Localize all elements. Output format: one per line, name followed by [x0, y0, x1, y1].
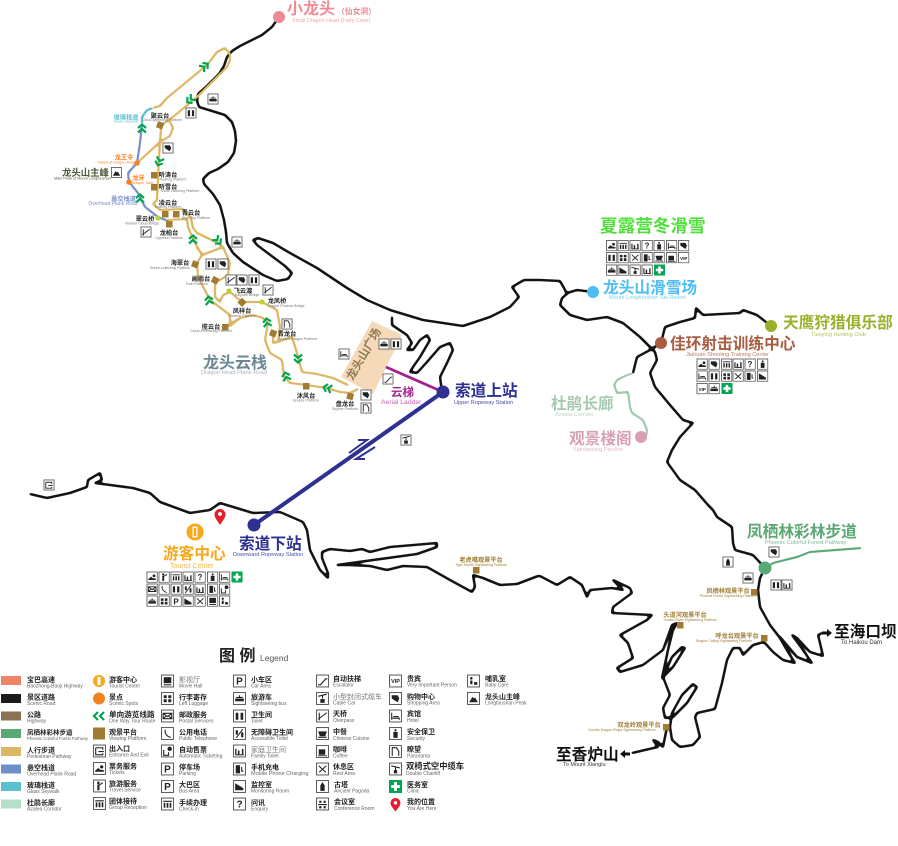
- legend column: facilities B: Car Area: [251, 684, 271, 690]
- legend column: spots and services: Tickets: [109, 770, 125, 776]
- legend column: facilities D: 双椅式空中缆车: [406, 761, 464, 771]
- legend heading: 图 例: [219, 647, 255, 665]
- label: aerial ladder: [381, 385, 422, 406]
- label: sightseeing pavilion: 观景楼阁: [569, 429, 632, 448]
- viewing platform labels: 呼龙台观景平台: [715, 632, 759, 640]
- trail point labels: Skyline Platform: [332, 407, 358, 411]
- trail point labels: 翠云桥: [136, 215, 155, 223]
- orange spot and path labels: [88, 114, 154, 207]
- legend column: spots and services: 票务服务: [109, 762, 137, 770]
- azalea corridor path: [614, 373, 647, 437]
- trail point labels: Phoenix Platform: [228, 314, 256, 318]
- legend column: road types: 公路: [27, 710, 41, 719]
- legend column: spots and services: Viewing Platform: [109, 736, 146, 742]
- legend column: facilities D: Clinic: [407, 788, 420, 794]
- legend heading: [219, 647, 289, 665]
- label: to Haikou Dam: 至海口坝: [834, 623, 897, 641]
- orange spot and path labels: 龙牙: [132, 174, 145, 182]
- legend column: facilities D: 医务室: [407, 780, 428, 789]
- label: hunting club: Tianying Hunting Club: [811, 332, 866, 338]
- label: camping and skiing: 夏露营冬滑雪: [600, 216, 706, 236]
- legend column: facilities C: Rest Area: [333, 771, 355, 777]
- trail point labels: Snow Listening Platform: [161, 189, 199, 193]
- legend column: facilities C: 小型封闭式缆车: [333, 692, 382, 701]
- orange spot and path labels: 悬空栈道: [111, 195, 137, 203]
- icon: you are here pin: [214, 509, 226, 525]
- label: upper station: 索道上站: [455, 381, 518, 400]
- trail point labels: 青龙台: [278, 330, 296, 338]
- icon grid: ski resort: [606, 240, 689, 276]
- legend column: road types: 宝巴高速: [27, 675, 55, 684]
- viewing platform labels: 老虎嘴观景平台: [459, 556, 503, 564]
- trail point labels: Hidden Dragon Platform: [279, 337, 317, 341]
- legend column: facilities B: Enquiry: [251, 806, 268, 812]
- legend column: facilities C: 天桥: [333, 709, 347, 718]
- label: to Xianglu Mountain: 至香炉山: [556, 746, 619, 764]
- tour direction chevrons: [136, 61, 332, 393]
- legend column: facilities C: Escalator: [333, 682, 354, 688]
- legend column: road types: Baozhong-Baoji Highway: [27, 684, 83, 690]
- legend column: facilities A: 手续办理: [179, 798, 207, 807]
- legend column: facilities C: Conference Room: [334, 806, 375, 812]
- legend heading: Legend: [260, 653, 289, 663]
- legend column: facilities A: Postal Services: [179, 718, 214, 724]
- legend column: facilities B: 监控室: [251, 780, 272, 789]
- legend column: spots and services: Tourist Center: [109, 684, 140, 690]
- legend column: facilities A: 影视厅: [179, 675, 200, 684]
- legend column: spots and services: One Way Tour Route: [109, 718, 156, 724]
- station and spot dots: [126, 11, 777, 574]
- legend column: facilities C: Overpass: [333, 718, 355, 724]
- legend column: facilities E: [468, 674, 527, 706]
- legend column: spots and services: Travel Service: [109, 788, 141, 794]
- legend column: facilities D: Very Important Person: [407, 682, 457, 688]
- legend column: facilities D: Shopping Area: [407, 700, 440, 706]
- legend column: facilities D: 安全保卫: [407, 727, 435, 736]
- viewing platform labels: Dragon Calling Sightseeing Platform: [696, 639, 752, 643]
- trail point labels: Cypress Platform: [155, 236, 183, 240]
- trail point labels: 盘龙台: [336, 400, 354, 408]
- legend column: road types: Scenic Road: [27, 701, 56, 707]
- legend column: facilities D: 瞭望: [407, 744, 421, 754]
- trail point labels: Verdant Cloud Bridge: [125, 222, 159, 226]
- overhead plank road: [128, 124, 168, 221]
- legend column: spots and services: [93, 675, 156, 811]
- legend column: spots and services: 观景平台: [109, 728, 137, 736]
- legend column: facilities B: 手机充电: [251, 762, 279, 772]
- label: sightseeing pavilion: Sightseeing Pavilion: [573, 447, 623, 453]
- legend column: spots and services: 游客中心: [109, 675, 137, 684]
- viewing platform labels: Phoenix Forest Sightseeing Platform: [700, 594, 756, 598]
- legend column: facilities D: Security: [407, 736, 426, 742]
- legend column: road types: Highway: [27, 718, 47, 724]
- legend column: facilities D: 宾馆: [407, 709, 421, 718]
- legend column: facilities C: 休息区: [333, 762, 354, 771]
- legend column: facilities A: Bus Area: [179, 788, 200, 794]
- legend column: facilities C: Coffee: [333, 754, 348, 760]
- trail point labels: Blue Sky Platform: [182, 216, 210, 220]
- label: tourist center: [163, 524, 226, 570]
- legend column: spots and services: Scenic Spots: [109, 701, 139, 707]
- viewing platform labels: [455, 556, 759, 732]
- aerial ladder line: [386, 367, 443, 392]
- trail point labels: Cloud-gathering Platform: [142, 118, 182, 122]
- label: aerial ladder: 云梯: [391, 385, 414, 399]
- icon grid: ski resort: VIP: [680, 256, 687, 261]
- label: upper station: Upper Ropeway Station: [454, 400, 513, 406]
- main peak label: [54, 167, 122, 180]
- trail point labels: 凤祥台: [233, 307, 251, 315]
- legend column: facilities A: 大巴区: [179, 780, 200, 789]
- legend column: facilities B: Accessible Toilet: [251, 736, 288, 742]
- legend column: facilities D: VIP: [391, 679, 400, 685]
- orange spot and path labels: 龙王令: [115, 154, 134, 162]
- legend column: spots and services: 景点: [109, 692, 123, 702]
- legend column: facilities B: 旅游车: [251, 692, 272, 702]
- legend column: facilities C: 咖啡: [333, 744, 347, 754]
- trail point labels: 聚云台: [151, 112, 169, 120]
- orange spot and path labels: Dragon Tooth: [132, 181, 154, 185]
- label: lower station: 索道下站: [239, 534, 302, 553]
- trail point labels: Kaiyuan Bridge: [235, 293, 259, 297]
- legend column: facilities B: P: [236, 676, 243, 688]
- trail point labels: Rain Platform: [186, 282, 208, 286]
- icon grid: tourist center: ?: [198, 573, 203, 582]
- legend column: facilities B: Monitoring Room: [251, 788, 289, 794]
- trail point labels: 龙凤桥: [268, 297, 287, 305]
- panel: legend: [1, 647, 527, 812]
- label: hunting club: [783, 313, 893, 338]
- label: upper station: [454, 381, 518, 406]
- legend column: spots and services: Group Reception: [109, 805, 147, 811]
- legend column: facilities A: [162, 675, 223, 812]
- orange spot and path labels: Overhead Plank Road: [88, 201, 138, 207]
- label: shooting center: 佳环射击训练中心: [670, 334, 796, 353]
- legend column: facilities B: Toilet: [251, 718, 263, 724]
- legend column: facilities B: 卫生间: [251, 710, 272, 719]
- legend column: facilities B: 家庭卫生间: [251, 745, 286, 754]
- legend column: facilities C: 会议室: [334, 797, 355, 806]
- legend column: road types: 杜鹃长廊: [27, 798, 55, 807]
- label: lower station: [233, 534, 303, 558]
- viewing platform markers: [151, 121, 768, 731]
- viewing platform labels: Tiger Mouth Sightseeing Platform: [455, 563, 507, 567]
- phoenix forest pathway: [765, 548, 862, 568]
- legend column: facilities D: You Are Here: [407, 806, 437, 812]
- legend column: facilities A: P: [164, 782, 171, 793]
- legend column: facilities E: Baby Care: [485, 682, 509, 688]
- trail point labels: 听雪台: [159, 183, 177, 191]
- legend column: road types: 景区道路: [27, 692, 55, 702]
- map service icons: [44, 94, 792, 590]
- legend column: road types: 人行步道: [27, 746, 55, 754]
- trail point labels: 龙柏台: [160, 229, 178, 237]
- legend column: facilities D: Panorama: [407, 754, 430, 760]
- legend column: facilities A: 邮政服务: [179, 710, 207, 719]
- legend column: facilities A: 停车场: [179, 762, 200, 772]
- legend column: facilities C: Ancient Pagoda: [334, 788, 370, 794]
- label: azalea corridor: Azalea Corridor: [555, 412, 594, 418]
- trail point labels: 听涛台: [159, 171, 177, 179]
- label: plank road: Dragon Head Plank Road: [201, 370, 267, 376]
- legend column: facilities E: 龙头山主峰: [485, 692, 520, 701]
- label: small dragon head: Small Dragon Head (Fairy Cave): [292, 18, 370, 24]
- legend column: spots and services: 旅游服务: [109, 779, 137, 788]
- viewing platform labels: 头道河观景平台: [663, 611, 707, 619]
- label: hunting club: 天鹰狩猎俱乐部: [783, 313, 893, 332]
- legend column: facilities D: 贵宾: [407, 674, 421, 683]
- trail point labels: Soaring Platform: [155, 205, 181, 209]
- legend column: facilities B: Mobile Phone Charging: [251, 771, 308, 777]
- pedestrian trails: [137, 48, 358, 393]
- legend column: facilities C: 中餐: [333, 727, 347, 736]
- arrow: to Xianglu: [620, 750, 630, 758]
- trail point labels: 青云台: [182, 209, 200, 217]
- legend column: road types: 玻璃栈道: [27, 780, 55, 790]
- trail point labels: Breeze Platform: [293, 398, 319, 402]
- label: ski resort: Mount Longtoushan Ski Resort: [609, 295, 686, 301]
- legend column: facilities B: Family Toilet: [251, 754, 279, 760]
- legend column: road types: [1, 675, 89, 812]
- legend column: facilities C: 自动扶梯: [333, 674, 361, 683]
- legend column: facilities A: 自动售票: [179, 745, 207, 754]
- legend column: facilities A: 公用电话: [179, 728, 207, 736]
- viewing platform labels: Double-Dragon Ridge Sightseeing Platform: [588, 728, 656, 732]
- icon grid: tourist center: [147, 572, 242, 606]
- label: tourist center: 游客中心: [163, 544, 226, 563]
- legend column: facilities E: 哺乳室: [485, 674, 506, 683]
- legend column: road types: Overhead Plank Road: [27, 772, 76, 778]
- label: plank road: 龙头云栈: [203, 354, 267, 372]
- legend column: facilities D: 购物中心: [407, 692, 435, 701]
- label: ski resort: 龙头山滑雪场: [603, 279, 697, 297]
- legend column: road types: Azalea Corridor: [27, 806, 62, 812]
- label: aerial ladder: Aerial Ladder: [381, 399, 422, 406]
- legend column: facilities D: Hotel: [407, 718, 419, 724]
- plaza: Longtou mountain square: 龙头山广场: [343, 325, 384, 382]
- legend column: spots and services: 单向游览线路: [109, 709, 155, 719]
- legend column: facilities A: P: [164, 764, 171, 776]
- ropeway line: [254, 392, 443, 525]
- legend column: facilities D: [389, 674, 464, 812]
- legend column: facilities A: 行李寄存: [179, 692, 207, 702]
- legend column: facilities C: Chinese Cuisine: [333, 736, 370, 742]
- legend column: road types: Phoenix Colorful Forest Pathway: [27, 736, 89, 741]
- label: shooting center: Jiahuan Shooting Training Center: [686, 352, 769, 358]
- legend column: facilities B: 问讯: [251, 798, 265, 807]
- legend column: facilities B: Sightseeing bus: [251, 701, 287, 707]
- legend column: road types: Pedestrian Pathway: [27, 754, 72, 760]
- ropeway direction arrows: [349, 440, 375, 459]
- trail point labels: 沐风台: [297, 392, 315, 400]
- main peak label: 龙头山主峰: [62, 167, 110, 178]
- legend column: facilities A: Left Luggage: [179, 701, 208, 707]
- scenic road network: [30, 17, 823, 753]
- label: lower station: Downward Ropeway Station: [233, 552, 303, 558]
- legend column: facilities C: [317, 674, 382, 812]
- label: small dragon head: 小龙头: [287, 0, 335, 18]
- legend column: facilities A: Movie Hall: [179, 684, 202, 690]
- label: to Haikou Dam: To Haikou Dam: [841, 640, 882, 646]
- trail point labels: Dragon Phoenix Bridge: [267, 304, 305, 308]
- legend column: facilities D: 我的位置: [407, 797, 435, 806]
- legend column: road types: Glass Skywalk: [27, 789, 60, 795]
- viewing platform labels: 双龙岭观景平台: [617, 721, 661, 729]
- legend column: facilities A: Check-in: [179, 806, 199, 812]
- icon grid: tourist center: P: [173, 597, 179, 606]
- legend column: facilities C: 古塔: [334, 780, 348, 789]
- label: phoenix forest: 凤栖林彩林步道: [747, 522, 857, 541]
- legend column: facilities B: ?: [236, 800, 243, 810]
- viewing platform labels: 凤栖林观景平台: [706, 587, 750, 595]
- trail point labels: 飞云渡: [234, 287, 253, 295]
- trail point labels: [125, 112, 358, 411]
- trail point labels: 海翠台: [171, 259, 189, 267]
- arrow: to Haikou Dam: [822, 629, 832, 637]
- trail point labels: 揽云台: [202, 323, 220, 331]
- legend column: facilities B: [234, 675, 308, 812]
- trail point labels: Roaring Platform: [160, 178, 186, 182]
- icon grid: shooting center: ?: [748, 360, 753, 369]
- icon grid: shooting center: [697, 359, 768, 394]
- orange spot and path labels: Glass Skywalk: [114, 120, 138, 124]
- label: azalea corridor: 杜鹃长廊: [551, 394, 614, 413]
- label: tourist center: Tourist Center: [170, 563, 214, 570]
- legend column: facilities E: Longtoushan Peak: [485, 700, 527, 706]
- legend column: facilities D: Double Chairlift: [406, 771, 441, 777]
- orange spot and path labels: 玻璃栈道: [114, 114, 139, 122]
- main peak label: Main Peak of Mount Longtoushan: [54, 176, 111, 180]
- legend column: spots and services: 团体接待: [109, 796, 137, 806]
- trail point labels: Green-collecting Platform: [150, 266, 190, 270]
- trail point labels: 画雨台: [192, 275, 210, 283]
- legend column: facilities C: Cable Car: [333, 700, 356, 706]
- icon grid: shooting center: VIP: [699, 387, 706, 392]
- legend column: facilities A: Automatic Ticketing: [179, 754, 223, 760]
- trail point labels: Cloud-embracing Platform: [190, 329, 232, 333]
- label: phoenix forest: Phoenix Colorful Forest Pathway: [765, 540, 847, 546]
- glass skywalk: [142, 108, 153, 124]
- legend column: facilities A: Public Telephone: [179, 736, 217, 742]
- orange spot and path labels: Token of Dragon King: [98, 160, 134, 164]
- label: small dragon head: （仙女洞）: [337, 6, 376, 16]
- label: small dragon head: [287, 0, 376, 24]
- label: to Xianglu Mountain: To Mount Xianglu: [563, 762, 606, 768]
- legend column: road types: 凤栖林彩林步道: [27, 728, 73, 736]
- legend column: spots and services: Entrance And Exit: [109, 752, 149, 758]
- icon grid: ski resort: ?: [645, 242, 650, 250]
- legend column: facilities B: 小车区: [251, 675, 272, 684]
- legend column: spots and services: 出入口: [109, 744, 130, 753]
- legend column: facilities A: Parking: [179, 771, 196, 777]
- plaza: Longtou mountain square: [341, 321, 402, 394]
- viewing platform labels: Toudao River Sightseeing Platform: [663, 618, 717, 622]
- legend column: facilities B: 无障碍卫生间: [251, 728, 293, 736]
- trail point labels: 凌云台: [159, 199, 177, 207]
- legend column: road types: 悬空栈道: [27, 763, 55, 772]
